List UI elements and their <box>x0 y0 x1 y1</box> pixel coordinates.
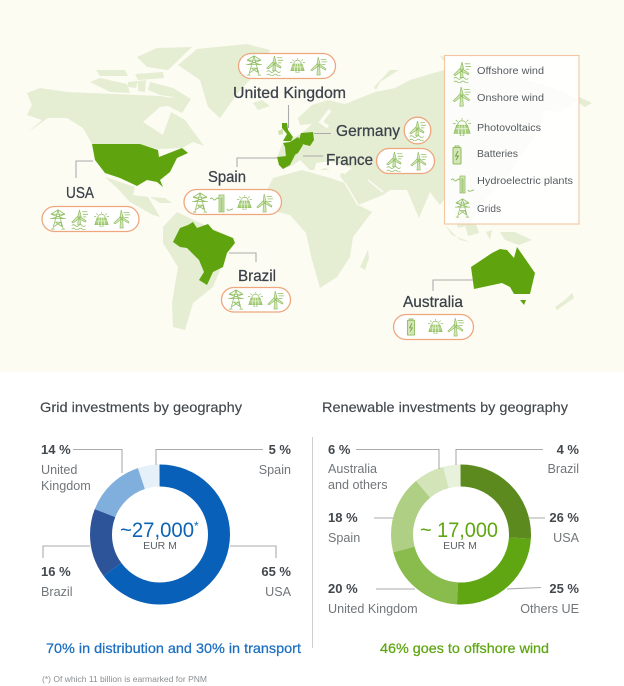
country: USA shape <box>92 144 188 187</box>
label: France: France <box>326 152 373 169</box>
renewable label: Others UE: Others UE <box>520 602 579 616</box>
renewable label: Brazil: Brazil <box>548 462 579 476</box>
grid label: Brazil: Brazil <box>41 585 72 599</box>
renewable label: USA: 26 % <box>549 510 579 525</box>
grid label: Brazil <box>41 564 72 599</box>
label: United Kingdom: United Kingdom <box>233 85 346 102</box>
renewable label: Australia and others: 6 % <box>328 442 351 457</box>
grid label: United Kingdom: Kingdom <box>41 479 91 493</box>
legend: Grids <box>477 203 501 215</box>
label: Australia: Australia <box>403 294 463 311</box>
renewable label: Spain <box>328 510 360 545</box>
label: United Kingdom <box>233 54 346 102</box>
seas <box>321 110 330 127</box>
renewable label: Others UE <box>520 581 579 616</box>
donut total: grid: ~27,000 <box>120 519 194 542</box>
country: Spain shape <box>277 155 295 169</box>
renewable label: USA: USA <box>553 531 580 545</box>
legend: Offshore wind <box>477 65 544 77</box>
grid label: United Kingdom: United <box>41 463 77 477</box>
renewable label: United Kingdom: 20 % <box>328 581 358 596</box>
panel: grid investments <box>40 399 301 684</box>
divider <box>312 437 314 648</box>
chart: grid donut <box>101 476 219 594</box>
donut total: grid <box>120 519 199 552</box>
footnote: (*) Of which 11 billion is earmarked for PNM <box>42 674 207 684</box>
land masses <box>27 44 592 330</box>
donut total: grid: * <box>194 519 199 533</box>
label: Brazil: Brazil <box>238 268 276 285</box>
grid label: Spain: Spain <box>259 463 291 477</box>
renewable label: Spain: Spain <box>328 531 360 545</box>
grid label: USA <box>261 564 292 599</box>
country: France shape <box>283 137 303 157</box>
grid leader lines <box>43 450 276 558</box>
renewable label: Spain: 18 % <box>328 510 358 525</box>
label: Germany: Germany <box>336 123 400 140</box>
Ireland <box>278 129 283 135</box>
renewable label: Australia and others: and others <box>328 478 388 492</box>
renewable summary: 46% goes to offshore wind <box>380 640 549 656</box>
grid label: Spain: 5 % <box>269 442 291 457</box>
heading: grid investments: Grid investments by geography <box>40 399 242 415</box>
donut total: renewable <box>420 519 498 552</box>
grid label: USA: 65 % <box>261 564 291 579</box>
renewable label: Brazil: 4 % <box>557 442 579 457</box>
grid summary: 70% in distribution and 30% in transport <box>46 640 301 656</box>
renewable label: United Kingdom: United Kingdom <box>328 602 418 616</box>
label: Brazil <box>222 268 290 312</box>
renewable label: USA <box>549 510 580 545</box>
label: Germany <box>336 117 431 144</box>
renewable label: Australia and others: Australia <box>328 462 377 476</box>
country: Australia shape <box>471 247 535 305</box>
country: United Kingdom shape <box>282 123 293 141</box>
renewable label: Others UE: 25 % <box>549 581 579 596</box>
renewable label: Australia and others <box>328 442 388 492</box>
donut total: renewable: ~ 17,000 <box>420 519 498 542</box>
legend: Batteries <box>477 148 518 160</box>
donut total: grid: EUR M <box>143 540 177 552</box>
label: USA <box>42 185 139 232</box>
country: Germany shape <box>298 132 314 146</box>
panel: world map <box>0 0 624 372</box>
label: USA: USA <box>66 185 94 202</box>
renewable label: United Kingdom <box>328 581 418 616</box>
chart: renewable donut <box>402 476 520 594</box>
grid label: United Kingdom <box>41 442 91 493</box>
label: Australia <box>394 294 474 340</box>
label: Spain <box>184 169 282 214</box>
label: France <box>326 148 434 174</box>
grid label: Brazil: 16 % <box>41 564 71 579</box>
legend: Hydroelectric plants <box>477 175 573 187</box>
legend: Photovoltaics <box>477 122 541 134</box>
connector lines <box>76 105 473 291</box>
grid label: United Kingdom: 14 % <box>41 442 71 457</box>
heading: renewable investments: Renewable investments by geography <box>322 399 568 415</box>
legend: Onshore wind <box>477 92 544 104</box>
country: Brazil shape <box>173 222 235 285</box>
legend <box>444 56 579 224</box>
grid label: USA: USA <box>265 585 292 599</box>
donut total: renewable: EUR M <box>443 540 477 552</box>
grid label: Spain <box>259 442 291 477</box>
renewable leader lines <box>356 450 545 589</box>
panel: renewable investments <box>322 399 580 656</box>
renewable label: Brazil <box>548 442 579 476</box>
label: Spain: Spain <box>208 169 246 186</box>
